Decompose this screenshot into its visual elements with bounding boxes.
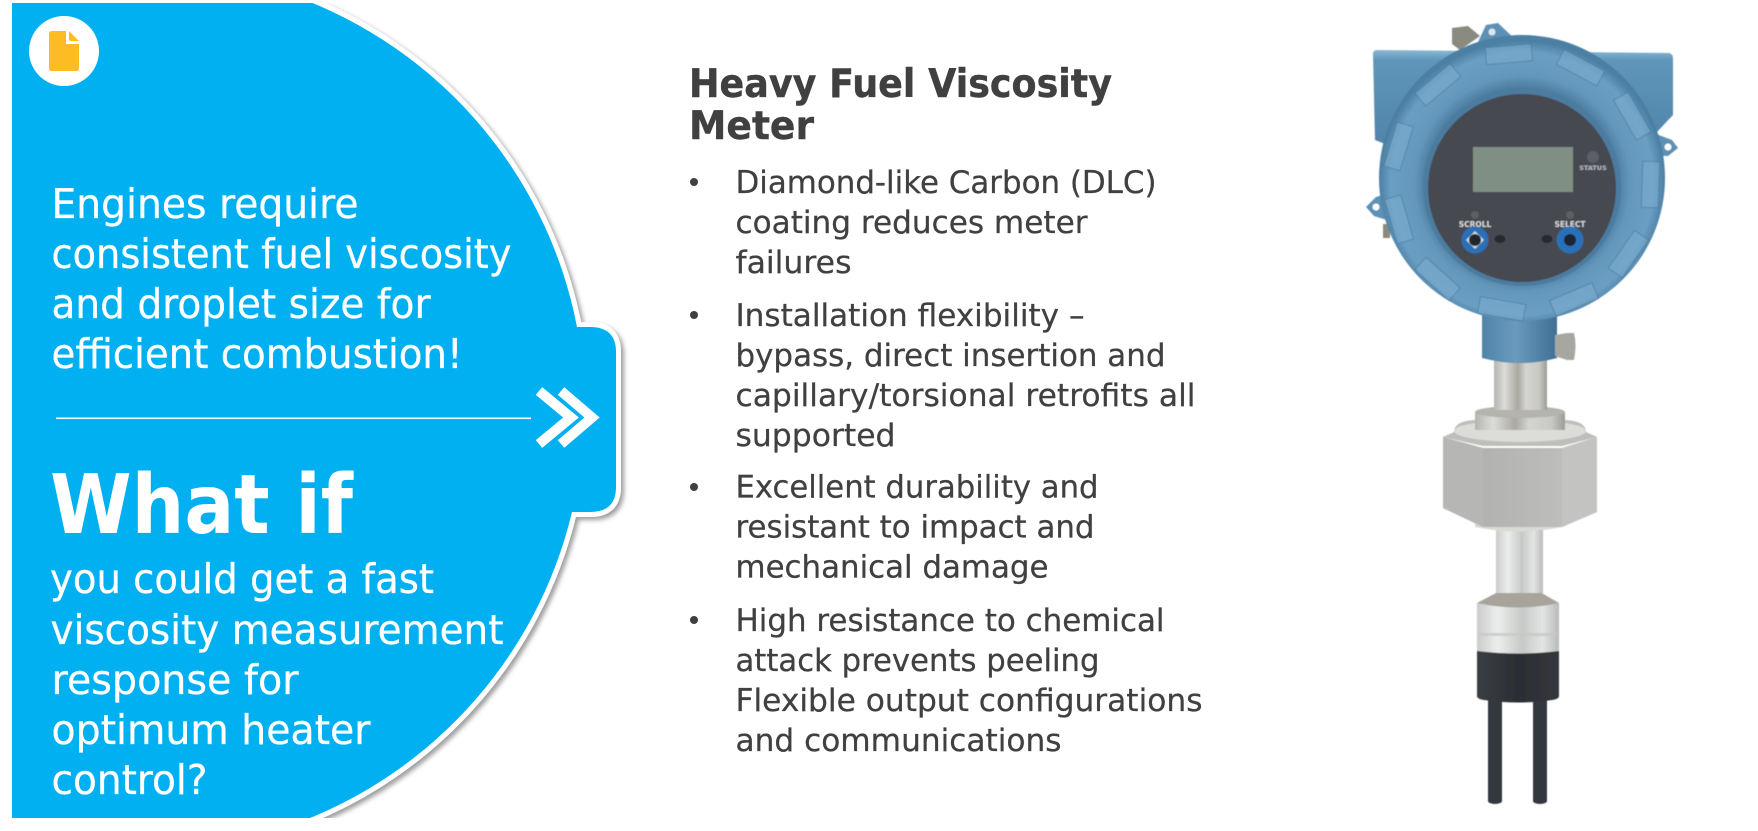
neck (1482, 310, 1557, 363)
text: engines statement: and droplet size for (52, 280, 431, 328)
select button: SELECT (1554, 220, 1586, 229)
housing wings (1373, 50, 1673, 150)
text: what if question: optimum heater (52, 706, 371, 754)
product illustration: viscosity meter (1366, 23, 1678, 804)
scroll button: SCROLL (1459, 220, 1492, 229)
bullet: installation flexibility: capillary/torsional retrofits all (736, 378, 1196, 414)
select button (1542, 211, 1586, 254)
dark face (1428, 94, 1616, 282)
bullet: DLC coating (690, 165, 1156, 281)
bullet: DLC coating: Diamond-like Carbon (DLC) (736, 165, 1156, 201)
bullet: durability: Excellent durability and (736, 470, 1098, 506)
LCD display (1473, 147, 1573, 192)
bullet: installation flexibility: bypass, direct insertion and (736, 338, 1166, 374)
heading: what if: What if (50, 458, 354, 553)
status LED and label: STATUS (1579, 164, 1607, 172)
bullet: chemical resistance: attack prevents peeling (736, 643, 1100, 679)
bullet list: features (690, 165, 1202, 759)
bullet: installation flexibility (690, 298, 1196, 454)
text: what if question: control? (52, 756, 208, 804)
bullet: DLC coating: failures (736, 245, 852, 281)
icon: double chevron arrow (539, 391, 592, 444)
heading: product name: Meter (689, 103, 814, 149)
bullet: installation flexibility: supported (736, 418, 896, 454)
bullet: chemical resistance: High resistance to chemical (736, 603, 1164, 639)
mounting lugs (1366, 23, 1678, 238)
transmitter housing (1366, 23, 1678, 363)
icon: document badge (29, 16, 99, 86)
scroll button (1459, 211, 1506, 254)
bullet: DLC coating: coating reduces meter (736, 205, 1088, 241)
text: engines statement: efficient combustion! (52, 330, 462, 378)
outer ring (1379, 35, 1665, 321)
bullet: installation flexibility: Installation flexibility – (736, 298, 1084, 334)
bullet: chemical resistance (690, 603, 1202, 759)
bullet: chemical resistance: and communications (736, 723, 1062, 759)
heading: product name: Heavy Fuel Viscosity (689, 61, 1112, 107)
text: engines statement (52, 180, 512, 378)
callout shape (0, 0, 616, 830)
bullet: durability: resistant to impact and (736, 510, 1094, 546)
bullet: durability (690, 470, 1098, 586)
panel: blue callout (0, 0, 616, 830)
status LED and label (1579, 151, 1607, 172)
text: what if question: response for (52, 656, 299, 704)
text: engines statement: Engines require (52, 180, 358, 228)
text: what if question: viscosity measurement (50, 606, 504, 654)
divider arrow line (56, 418, 531, 419)
text: what if question (50, 555, 504, 804)
sensor stem and fork (1443, 355, 1597, 804)
text: what if question: you could get a fast (50, 555, 434, 603)
bullet: chemical resistance: Flexible output configurations (736, 683, 1202, 719)
bullet: durability: mechanical damage (736, 550, 1048, 586)
heading: product name (689, 61, 1112, 149)
ring segments (1384, 44, 1660, 321)
text: engines statement: consistent fuel viscosity (52, 230, 512, 278)
